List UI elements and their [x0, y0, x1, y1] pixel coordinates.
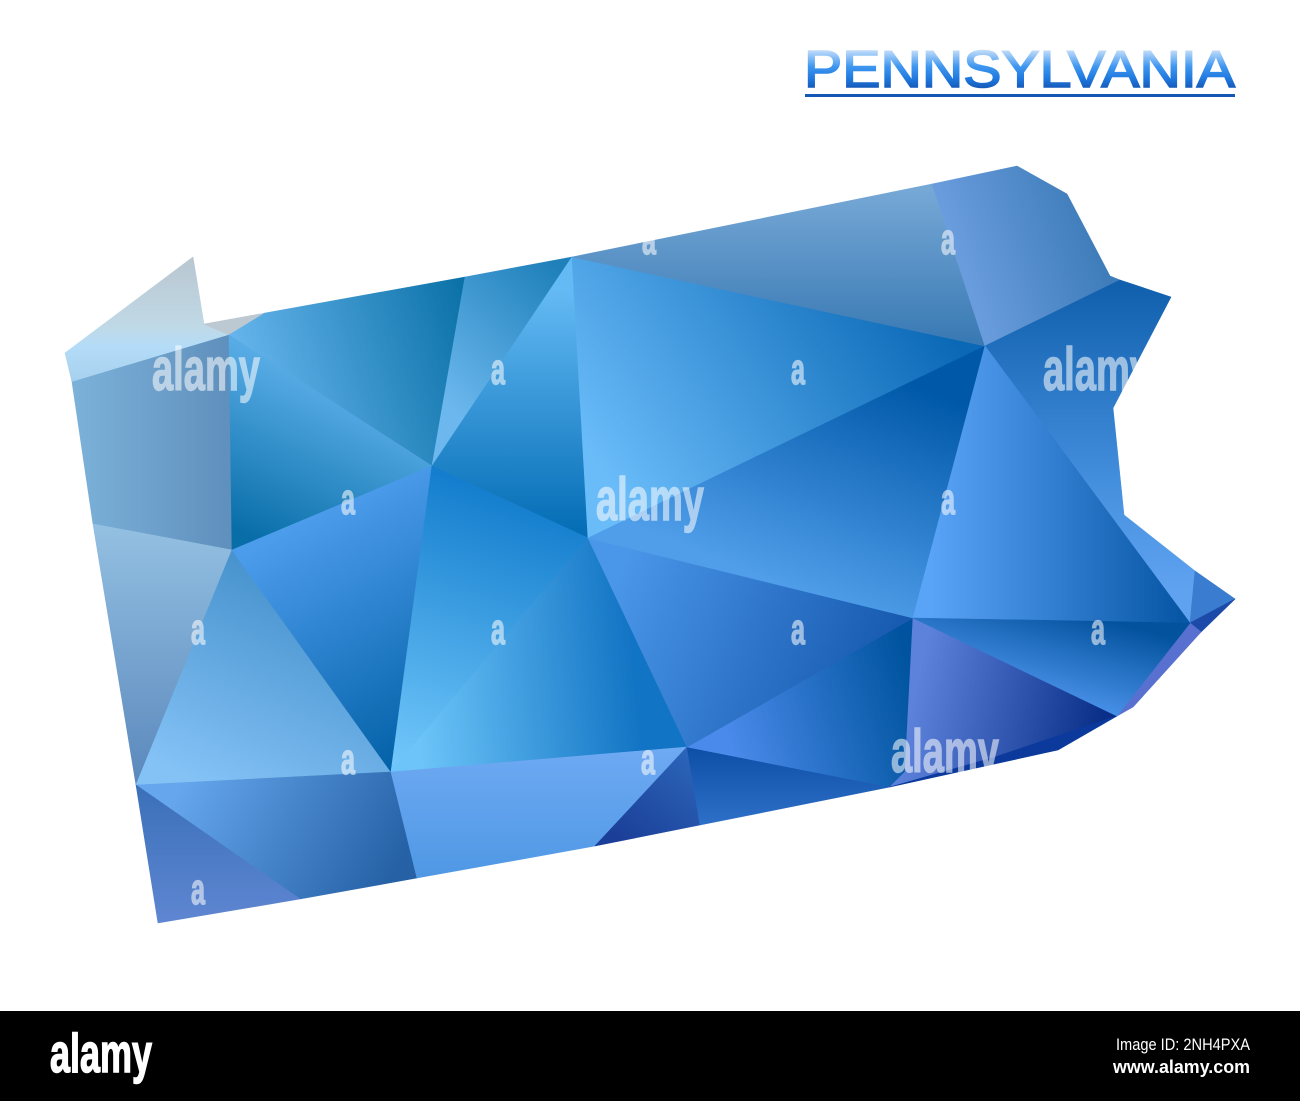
large watermarks	[152, 336, 1151, 785]
facet: west central	[232, 466, 432, 772]
large watermarks: alamy	[152, 336, 260, 403]
facet: upper west	[72, 335, 232, 550]
facet: south central	[391, 538, 687, 772]
facet: central east	[588, 538, 913, 747]
facet: southwest	[136, 772, 417, 899]
facet: northeast light	[932, 166, 1120, 346]
facet: southeast strip	[1117, 623, 1201, 716]
small watermarks: a	[1091, 605, 1105, 654]
facet: east tip	[1190, 571, 1235, 623]
large watermarks: alamy	[1043, 336, 1151, 403]
facet: east tip dark	[1190, 599, 1235, 632]
small watermarks: a	[491, 345, 505, 394]
small watermarks: a	[642, 215, 656, 264]
facet: large north	[572, 257, 985, 538]
watermarks	[152, 215, 1151, 914]
facet: east large	[913, 346, 1190, 623]
facet: large east central	[588, 346, 985, 618]
footer bar	[0, 1011, 1300, 1101]
small watermarks: a	[941, 475, 955, 524]
facet: northwest upper	[229, 277, 465, 466]
facet: north sliver	[432, 257, 572, 466]
small watermarks: a	[791, 605, 805, 654]
facet: southeast bottom edge	[890, 716, 1117, 787]
small watermarks	[191, 215, 1105, 914]
facet: south border	[391, 747, 687, 878]
facet: southwest corner	[136, 785, 300, 923]
facet: northwest tip	[65, 257, 229, 382]
facet: south dark triangle	[595, 747, 700, 846]
large watermarks: alamy	[891, 718, 999, 785]
facet: south east border	[687, 747, 890, 825]
facet: mid west	[93, 524, 232, 785]
facet: north central	[432, 257, 588, 538]
small watermarks: a	[791, 345, 805, 394]
small watermarks: a	[941, 215, 955, 264]
facet: lower west light	[136, 550, 391, 785]
small watermarks: a	[341, 475, 355, 524]
website: www.alamy.com	[1112, 1057, 1250, 1077]
large watermarks: alamy	[596, 466, 704, 533]
facet: northwest lower	[229, 335, 432, 550]
facet: southeast indigo	[890, 618, 1117, 787]
footer logo: alamy	[50, 1022, 152, 1084]
small watermarks: a	[191, 605, 205, 654]
facet: southeast inner	[687, 618, 913, 787]
small watermarks: a	[341, 735, 355, 784]
low-poly map of Pennsylvania	[65, 166, 1235, 923]
small watermarks: a	[191, 865, 205, 914]
facet: northeast and east edge	[985, 280, 1195, 623]
facet: lower east	[913, 618, 1190, 716]
image id: Image ID: 2NH4PXA	[1116, 1035, 1251, 1054]
small watermarks: a	[641, 735, 655, 784]
facet: central	[391, 466, 588, 772]
facet: northern band	[572, 184, 985, 346]
title: PENNSYLVANIA: PENNSYLVANIA	[804, 41, 1235, 99]
facet: grey wedge at notch	[204, 313, 265, 335]
small watermarks: a	[491, 605, 505, 654]
